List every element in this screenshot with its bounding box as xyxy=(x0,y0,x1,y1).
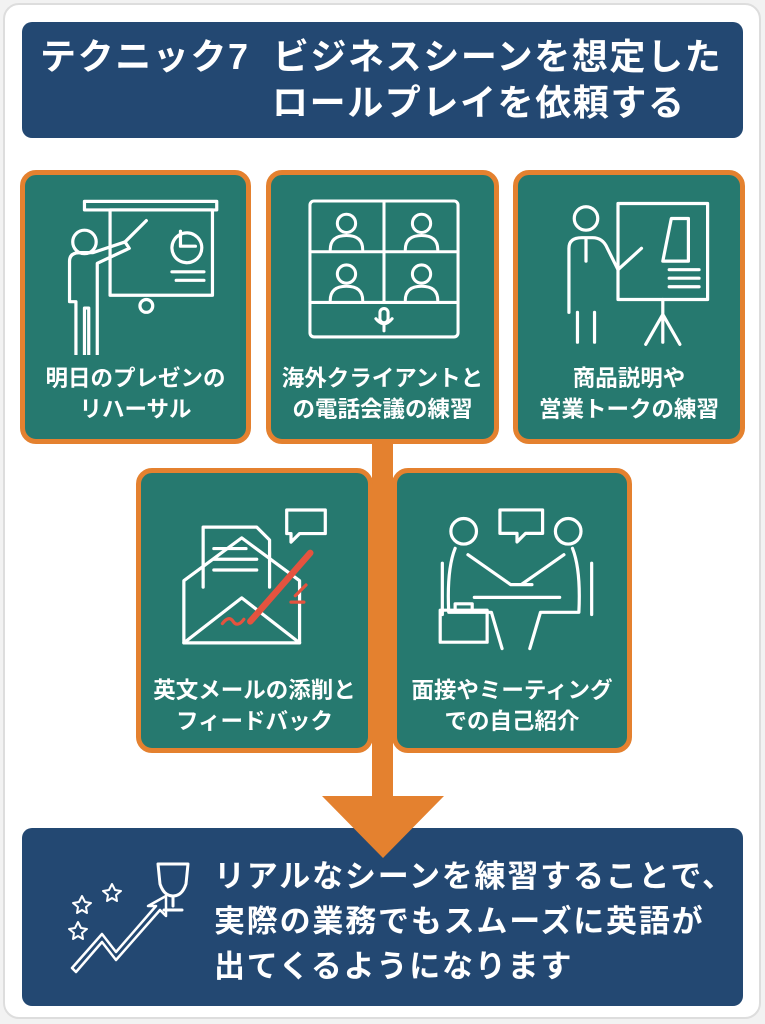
arrow stem xyxy=(372,440,393,800)
label: 面接やミーティング xyxy=(411,678,613,703)
card: email correction xyxy=(136,468,373,753)
title banner xyxy=(22,22,743,138)
label xyxy=(411,678,613,734)
conclusion banner xyxy=(22,828,743,1006)
card: presentation rehearsal xyxy=(20,170,251,444)
label: での自己紹介 xyxy=(444,709,580,734)
conclusion text: リアルなシーンを練習することで、 xyxy=(214,859,735,894)
label xyxy=(282,366,483,422)
label: リハーサル xyxy=(79,397,192,422)
title text: ロールプレイを依頼する xyxy=(272,82,686,123)
conclusion text: 実際の業務でもスムーズに英語が xyxy=(214,904,704,939)
label: 海外クライアントと xyxy=(282,366,483,391)
title text xyxy=(40,36,722,123)
label: 明日のプレゼンの xyxy=(45,366,226,391)
icon: handshake meeting xyxy=(438,508,594,650)
label xyxy=(153,678,356,734)
icon: presenter at easel xyxy=(567,202,710,346)
arrow head xyxy=(322,796,444,858)
icon: video call grid xyxy=(308,200,460,338)
icon: envelope with pen xyxy=(182,508,327,644)
conclusion text: 出てくるようになります xyxy=(214,949,573,984)
label: 英文メールの添削と xyxy=(153,678,356,703)
label xyxy=(45,366,226,422)
card: interview self-intro xyxy=(392,468,632,753)
icon: presenter xyxy=(68,200,218,355)
icon: trophy and rising arrow xyxy=(68,862,190,974)
label xyxy=(539,366,719,422)
card: sales talk xyxy=(513,170,745,444)
title text: テクニック7 ビジネスシーンを想定した xyxy=(40,36,722,77)
conclusion text xyxy=(214,859,735,984)
card: overseas call xyxy=(266,170,499,444)
label: 商品説明や xyxy=(573,366,685,391)
label: 営業トークの練習 xyxy=(539,397,719,422)
label: の電話会議の練習 xyxy=(292,397,472,422)
label: フィードバック xyxy=(176,709,333,734)
